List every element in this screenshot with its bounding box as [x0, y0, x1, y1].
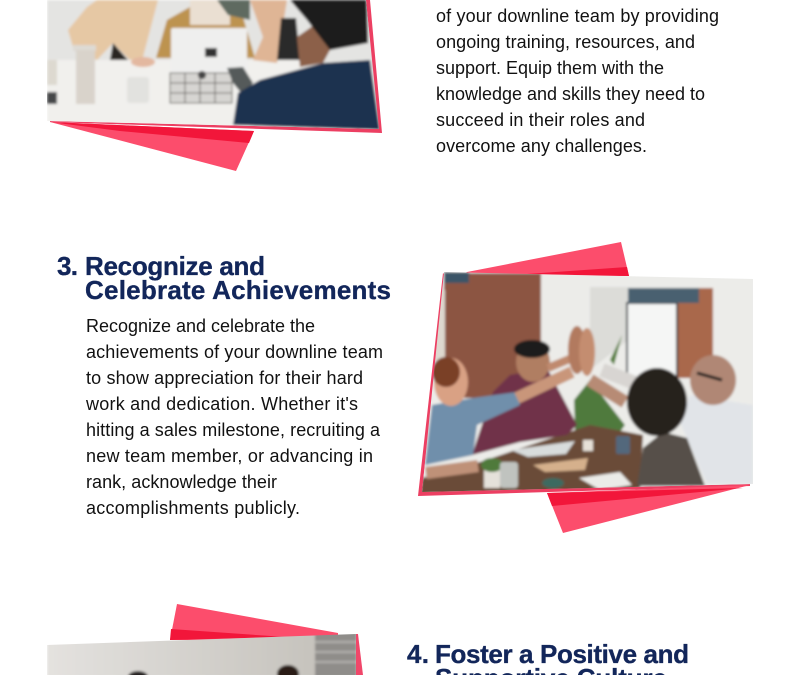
text block: step 3 body: rank, acknowledge their — [86, 472, 277, 492]
panel: step 4 photo with red accents — [47, 604, 363, 675]
text block: step 3 body: work and dedication. Whether it's — [85, 394, 358, 414]
text block: step 2 body: support. Equip them with the — [436, 58, 664, 78]
text block: step 2 body — [436, 6, 719, 156]
text block: step 3 body: accomplishments publicly. — [86, 498, 300, 518]
text block: step 3 body: to show appreciation for their hard — [86, 368, 363, 388]
text block: step 3 body — [85, 316, 383, 518]
heading: step 3: 3. — [57, 251, 78, 281]
red accent triangle and strip — [170, 604, 363, 675]
text block: step 2 body: ongoing training, resources, and — [436, 32, 695, 52]
panel: step 3 photo with red accents — [418, 242, 755, 533]
text block: step 3 body: new team member, or advancing in — [86, 446, 373, 466]
text block: step 2 body: knowledge and skills they need to — [436, 84, 705, 104]
heading: step 4: Foster a Positive and — [435, 639, 689, 669]
panel: step 2 photo with red accents — [47, 0, 382, 171]
heading: step 3: Celebrate Achievements — [85, 275, 391, 305]
photo: team around a laptop — [47, 0, 382, 135]
text block: step 3 body: hitting a sales milestone, recruiting a — [86, 420, 381, 440]
text block: step 2 body: succeed in their roles and — [436, 110, 645, 130]
text block: step 2 body: overcome any challenges. — [436, 136, 647, 156]
red accent frame and triangles — [418, 242, 750, 533]
red accent frame and triangle — [50, 0, 382, 171]
heading: step 3 — [57, 251, 391, 305]
heading: step 3: Recognize and — [85, 251, 265, 281]
text block: step 2 body: of your downline team by providing — [436, 6, 719, 26]
text block: step 3 body: achievements of your downline team — [86, 342, 383, 362]
heading: step 4: 4. — [407, 639, 429, 669]
photo: team high five — [420, 270, 755, 495]
photo: team in bright room — [47, 632, 357, 675]
text block: step 3 body: Recognize and celebrate the — [86, 316, 315, 336]
